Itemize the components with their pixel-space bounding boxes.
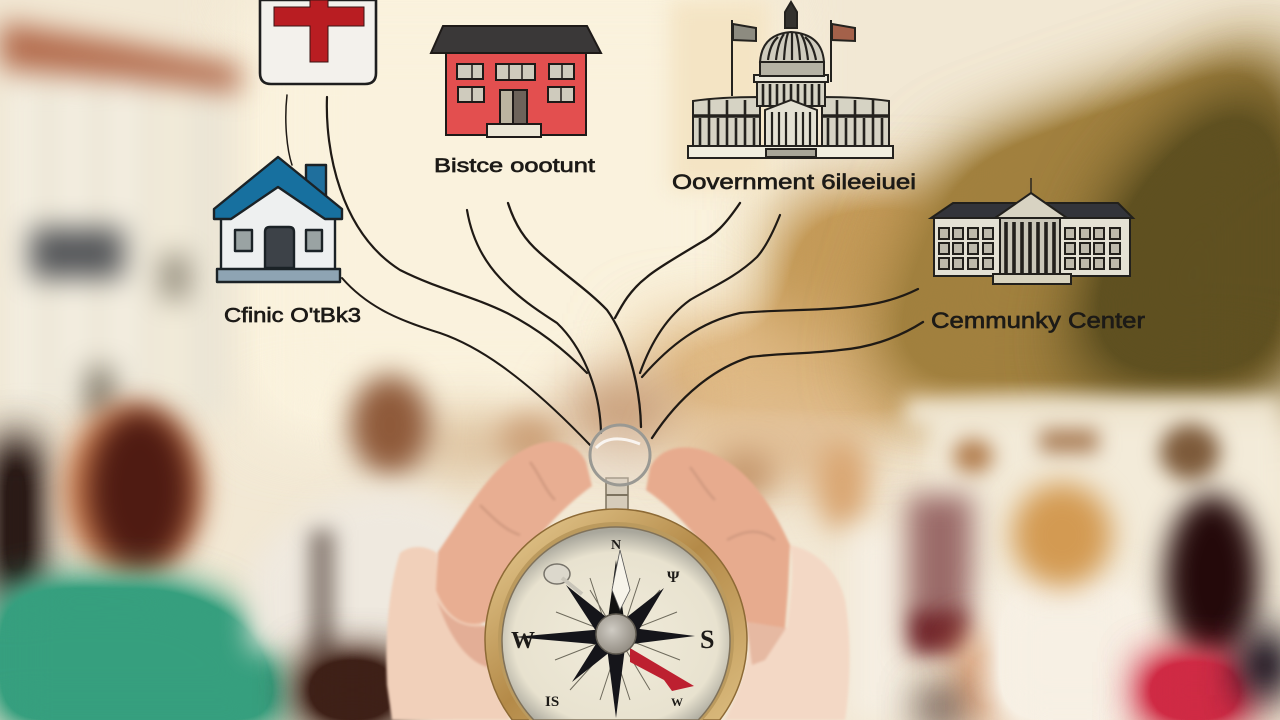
label: school: Bistce oootunt bbox=[434, 156, 596, 177]
icon: medical cross bbox=[260, 0, 376, 84]
person: blonde woman bbox=[1000, 430, 1140, 720]
right colonnade bbox=[905, 398, 1280, 625]
compass dial bbox=[502, 527, 730, 720]
icon: red school building bbox=[431, 26, 601, 137]
label: community center: Cemmunky Center bbox=[931, 308, 1145, 333]
left hand bbox=[386, 442, 592, 720]
right hand bbox=[646, 447, 850, 720]
compass marks: S bbox=[700, 625, 714, 654]
lower haze bbox=[560, 372, 680, 452]
icon: blue-roofed house bbox=[214, 157, 342, 282]
hands holding compass bbox=[386, 425, 850, 720]
connector lines bbox=[286, 95, 923, 445]
blurred crowd bbox=[0, 375, 1280, 720]
compass marks: IS bbox=[545, 694, 559, 710]
wings bbox=[693, 97, 889, 146]
person: man in white shirt bbox=[250, 375, 485, 720]
label: government: Oovernment 6ileeiuei bbox=[672, 171, 916, 194]
dome bbox=[754, 2, 828, 106]
icon: government capitol bbox=[688, 2, 893, 158]
person: woman in red bbox=[1145, 424, 1280, 720]
flags bbox=[732, 20, 855, 96]
left building bbox=[0, 22, 240, 418]
compass marks: N bbox=[611, 538, 621, 553]
person: woman in green bbox=[0, 404, 285, 720]
compass marks: Ψ bbox=[667, 569, 680, 586]
gold haze and tree bbox=[650, 210, 980, 410]
compass marks: W bbox=[671, 695, 683, 709]
windows bbox=[939, 228, 1120, 269]
icon: community center building bbox=[931, 178, 1133, 284]
person: background figures bbox=[496, 412, 1007, 720]
compass case bbox=[485, 509, 747, 720]
compass marks bbox=[511, 538, 714, 710]
compass rose bbox=[514, 550, 695, 718]
portico bbox=[765, 100, 817, 146]
compass marks: W bbox=[511, 628, 535, 654]
label: clinic: Cfinic O'tBk3 bbox=[224, 305, 361, 327]
compass ring and stem bbox=[590, 425, 650, 512]
